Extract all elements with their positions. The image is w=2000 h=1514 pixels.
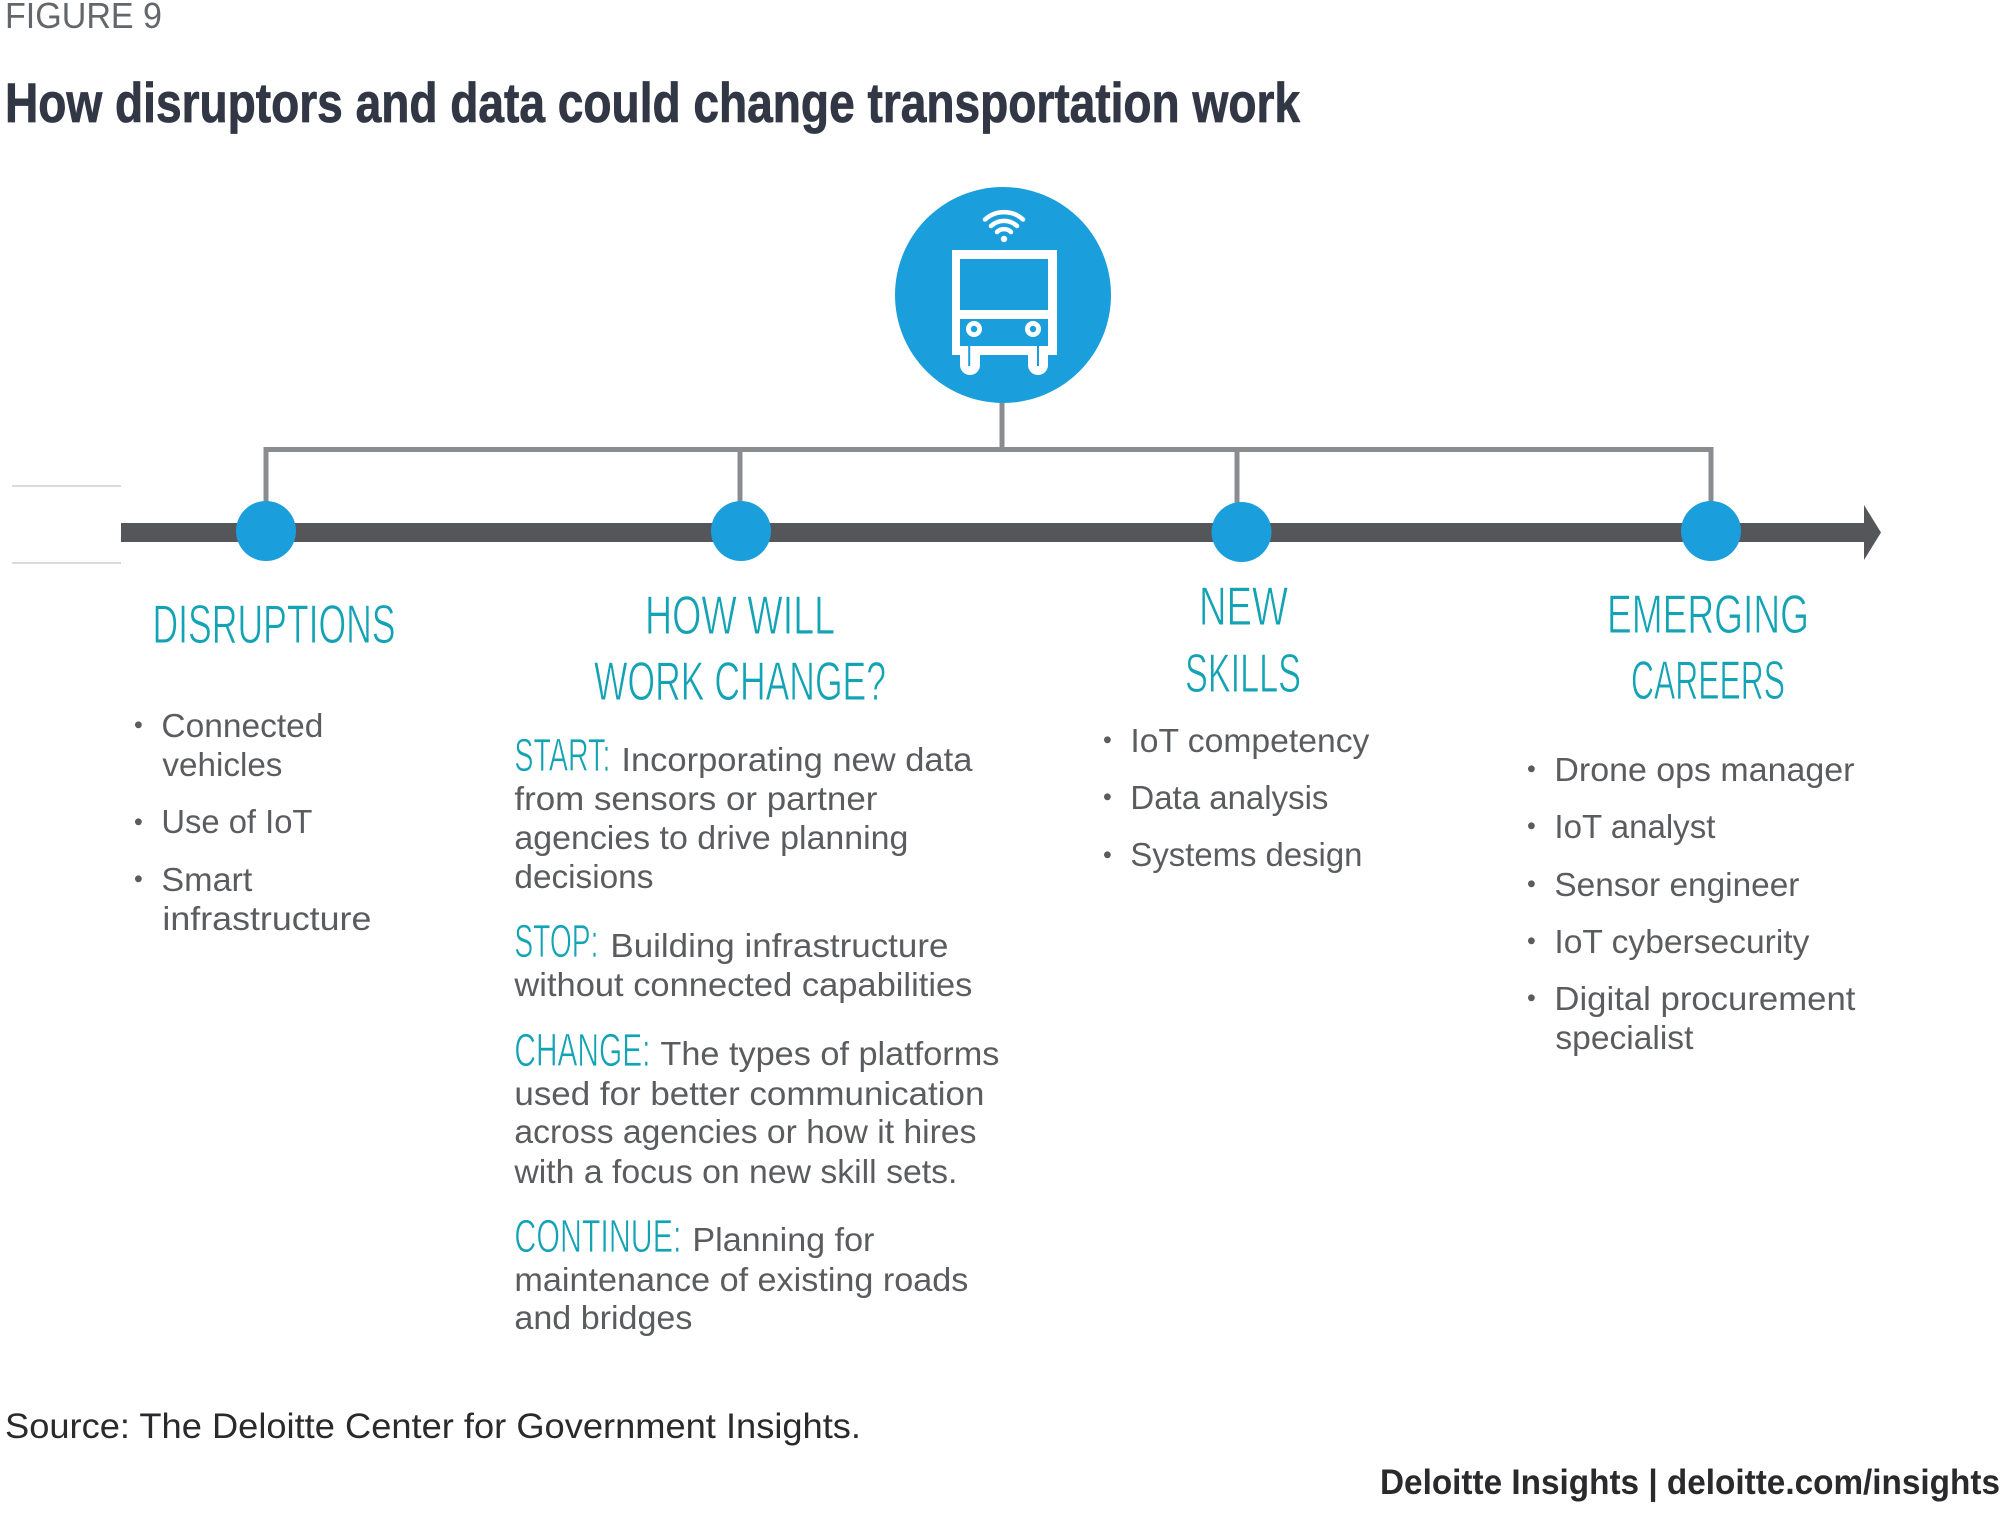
text block: continue: CONTINUE: (514, 1210, 681, 1262)
text block: stop: STOP: (514, 915, 598, 967)
heading: new skills: NEW (1199, 575, 1288, 637)
list: new skills (1104, 723, 1370, 874)
text block: change: The types of platforms (660, 1036, 999, 1073)
list: new skills: IoT competency (1130, 723, 1370, 760)
heading: how will work change (594, 584, 886, 712)
title: How disruptors and data could change transportation work (5, 71, 1301, 134)
text block: start: Incorporating new data (621, 742, 973, 779)
text block: stop: Building infrastructure (610, 928, 948, 965)
milestone dots (236, 501, 1741, 562)
list: emerging careers: specialist (1555, 1020, 1694, 1057)
text block: start: decisions (514, 859, 653, 896)
list: emerging careers (1528, 752, 1856, 1057)
text block: continue (514, 1210, 968, 1337)
timeline diagram (12, 400, 1881, 563)
text block: change: used for better communication (514, 1076, 984, 1113)
text block: continue: maintenance of existing roads (514, 1262, 968, 1299)
list: emerging careers: Drone ops manager (1554, 752, 1854, 789)
list: emerging careers: IoT cybersecurity (1554, 924, 1810, 961)
text block: change: CHANGE: (514, 1024, 650, 1076)
text block: continue: and bridges (514, 1300, 692, 1337)
list: disruptions: infrastructure (162, 901, 371, 938)
bus body (952, 250, 1057, 375)
text block: change: with a focus on new skill sets. (513, 1154, 957, 1191)
list: emerging careers: IoT analyst (1554, 809, 1716, 846)
text block: start: from sensors or partner (514, 781, 877, 818)
text block: start (514, 729, 973, 896)
text block: change (513, 1024, 999, 1191)
heading: emerging careers: CAREERS (1631, 649, 1785, 711)
timeline arrow (121, 505, 1881, 560)
list: disruptions: vehicles (162, 747, 282, 784)
text block: stop (513, 915, 972, 1004)
panel: how will work change (513, 584, 999, 1337)
panel: emerging careers (1528, 583, 1856, 1057)
icon: connected bus (895, 187, 1111, 403)
heading: how will work change: WORK CHANGE? (594, 650, 886, 712)
text block: stop: without connected capabilities (513, 967, 972, 1004)
panel: disruptions (135, 593, 396, 938)
heading: how will work change: HOW WILL (645, 584, 835, 646)
heading: disruptions: DISRUPTIONS (152, 593, 396, 655)
list: disruptions (135, 708, 371, 938)
source note: Source: The Deloitte Center for Government Insights. (5, 1407, 861, 1446)
list: disruptions: Use of IoT (161, 804, 312, 841)
wifi signal (985, 212, 1023, 242)
heading: emerging careers: EMERGING (1607, 583, 1809, 645)
text block: start: agencies to drive planning (514, 820, 908, 857)
list: disruptions: Connected (161, 708, 323, 745)
connector bracket (266, 400, 1711, 505)
text block: change: across agencies or how it hires (514, 1114, 976, 1151)
heading: new skills: SKILLS (1185, 642, 1301, 704)
text block: start: START: (514, 729, 610, 781)
list: emerging careers: Digital procurement (1554, 981, 1856, 1018)
list: new skills: Systems design (1130, 837, 1362, 874)
panel: new skills (1104, 575, 1370, 874)
list: emerging careers: Sensor engineer (1554, 867, 1799, 904)
heading: new skills (1185, 575, 1301, 704)
heading: emerging careers (1607, 583, 1809, 711)
list: new skills: Data analysis (1130, 780, 1328, 817)
list: disruptions: Smart (161, 862, 253, 899)
text block: continue: Planning for (692, 1222, 874, 1259)
